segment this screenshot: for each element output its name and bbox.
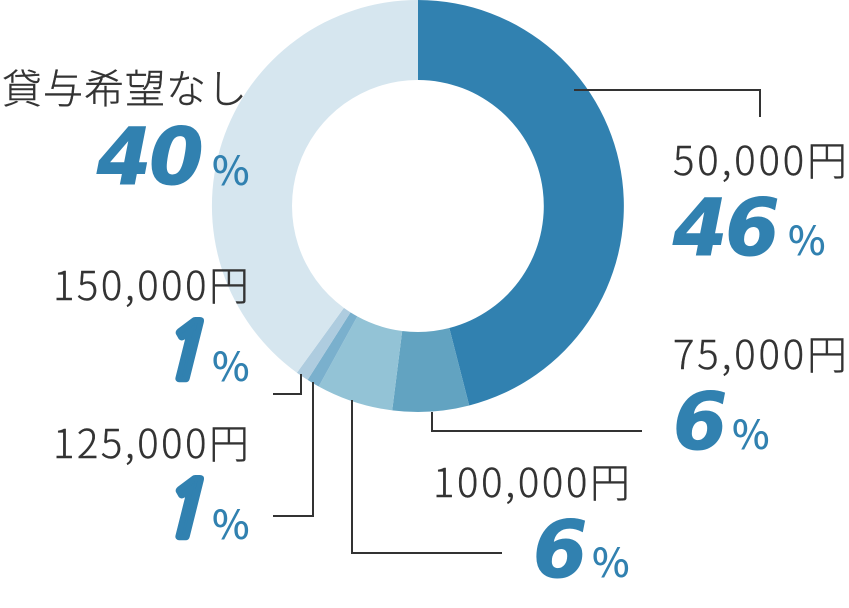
label: 貸与希望なし 40%: 40 (96, 113, 202, 203)
label: 125,000円 1% (53, 412, 250, 551)
label: 50,000円 46%: 50,000円 (673, 129, 847, 187)
label: 150,000円 1%: 1 (157, 313, 204, 391)
label: 50,000円 46%: 46 (672, 184, 778, 274)
label: 150,000円 1%: 150,000円 (53, 254, 249, 312)
label: 100,000円 6%: 100,000円 (433, 451, 630, 509)
segment: 貸与希望なし 40% (212, 0, 418, 373)
label: 75,000円 6% (673, 323, 847, 468)
label: 75,000円 6%: 6 (673, 378, 725, 468)
leader line: 100,000円 (352, 400, 502, 553)
segment: 75,000円 6% (392, 328, 469, 412)
label: 150,000円 1%: % (212, 335, 250, 393)
label: 100,000円 6% (433, 451, 630, 596)
segment: 50,000円 46% (418, 0, 624, 406)
label: 100,000円 6%: % (592, 531, 630, 589)
label: 75,000円 6%: % (732, 403, 770, 461)
label: 貸与希望なし 40%: % (212, 139, 250, 197)
label: 150,000円 1% (53, 254, 250, 393)
label: 100,000円 6%: 6 (533, 506, 585, 596)
label: 125,000円 1%: 1 (157, 471, 204, 549)
leader line: 75,000円 (432, 412, 642, 431)
segment: 150,000円 1% (297, 308, 350, 380)
leader line: 150,000円 (273, 374, 301, 394)
leader line: 50,000円 (574, 90, 760, 117)
label: 75,000円 6%: 75,000円 (673, 323, 847, 381)
label: 貸与希望なし 40%: 貸与希望なし (2, 57, 247, 115)
leader line: 125,000円 (273, 382, 313, 516)
label: 50,000円 46% (672, 129, 847, 274)
segment: 100,000円 6% (319, 316, 402, 410)
label: 125,000円 1%: % (212, 493, 250, 551)
label: 50,000円 46%: % (788, 209, 826, 267)
label: 貸与希望なし 40% (2, 57, 250, 203)
donut chart (212, 0, 624, 412)
label: 125,000円 1%: 125,000円 (53, 412, 249, 470)
segment: 125,000円 1% (308, 312, 357, 386)
